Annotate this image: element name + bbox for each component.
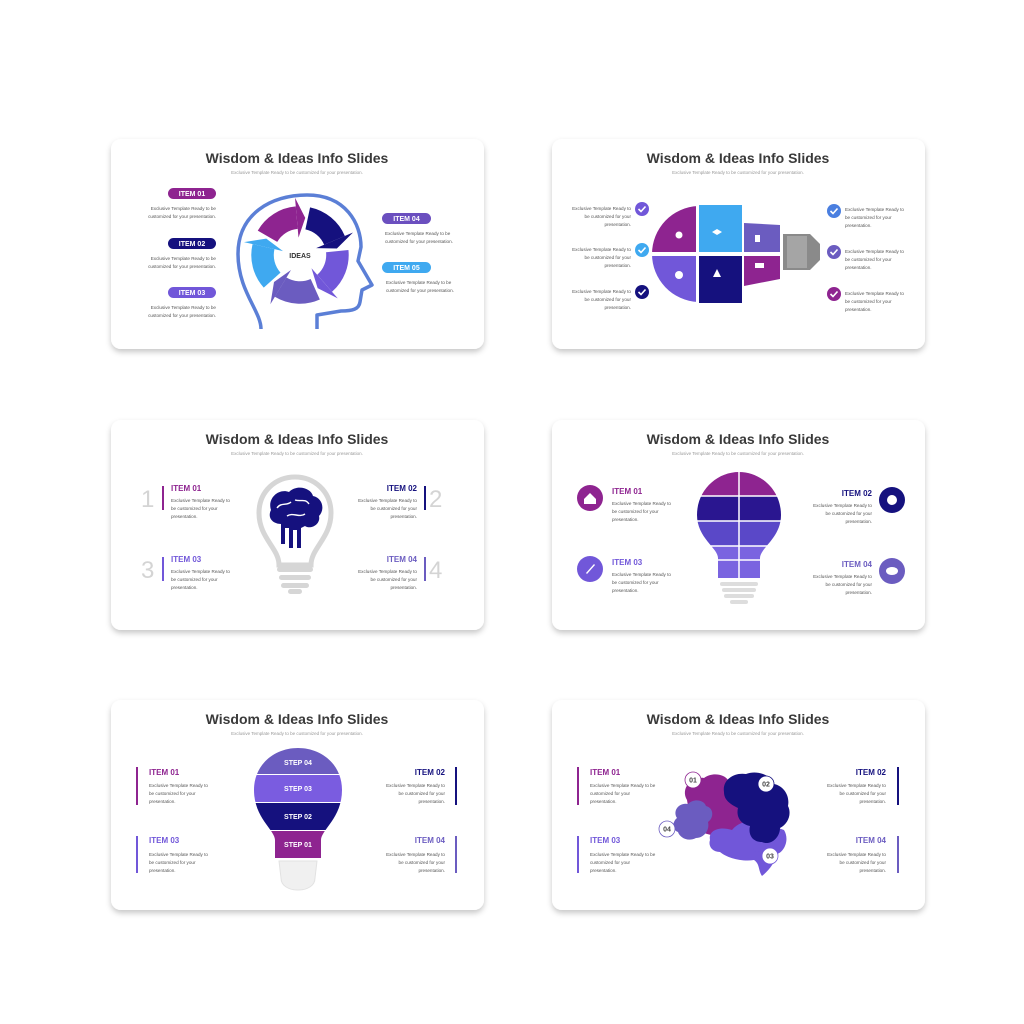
subtitle: Exclusive Template Ready to be customized for your presentation.: [231, 170, 363, 175]
left checks: be customized for your: [585, 214, 631, 219]
item 04: presentation.: [390, 585, 417, 590]
item 01: Exclusive Template Ready to: [149, 783, 208, 788]
title: Wisdom & Ideas Info Slides: [647, 711, 830, 727]
item 04: Exclusive Template Ready to: [827, 852, 886, 857]
item 03: be customized for your: [149, 860, 196, 865]
right checks: presentation.: [845, 223, 872, 228]
right checks: Exclusive Template Ready to: [845, 291, 904, 296]
bulb with brain: [259, 477, 331, 594]
title: Wisdom & Ideas Info Slides: [206, 711, 389, 727]
right checks: presentation.: [845, 307, 872, 312]
item 04: be customized for your: [840, 860, 886, 865]
item 01: ITEM 01: [612, 487, 643, 496]
item 03: presentation.: [171, 585, 198, 590]
item 02: presentation.: [859, 799, 886, 804]
item 04: be customized for your: [371, 577, 417, 582]
item 04: presentation.: [418, 868, 445, 873]
item 04: presentation.: [845, 590, 872, 595]
item 02: presentation.: [390, 514, 417, 519]
head outline: [238, 195, 372, 329]
item 01: [577, 485, 671, 522]
item 02: [386, 767, 457, 805]
item 04: [386, 836, 457, 873]
right checks: be customized for your: [845, 257, 892, 262]
item 01: Exclusive Template Ready to: [612, 501, 671, 506]
item 01: Exclusive Template Ready to be: [151, 206, 216, 211]
quadrant icons: [675, 229, 764, 279]
item 04: Exclusive Template Ready to: [358, 569, 417, 574]
item 01: presentation.: [149, 799, 176, 804]
item 01: [577, 767, 656, 805]
item 01: be customized for your: [149, 791, 196, 796]
item 03: [136, 836, 208, 873]
item 02: ITEM 02: [179, 241, 205, 248]
right checks: Exclusive Template Ready to: [845, 207, 904, 212]
item 01: presentation.: [612, 517, 639, 522]
left checks: Exclusive Template Ready to: [572, 247, 631, 252]
item 02: [358, 484, 442, 519]
item 03: be customized for your: [171, 577, 218, 582]
left checks: presentation.: [604, 222, 631, 227]
item 01: Exclusive Template Ready to be: [590, 783, 656, 788]
item 01: [141, 484, 230, 519]
item 03: [577, 556, 671, 593]
subtitle: Exclusive Template Ready to be customized for your presentation.: [231, 731, 363, 736]
bulb quadrants: [652, 205, 742, 303]
item 04: [827, 836, 899, 873]
item 02: customized for your presentation.: [148, 264, 216, 269]
item 02: Exclusive Template Ready to: [827, 783, 886, 788]
right checks: be customized for your: [845, 215, 892, 220]
right checks: [827, 204, 904, 312]
item 02: Exclusive Template Ready to: [386, 783, 445, 788]
slide 3: brain bulb numbered: [111, 420, 484, 630]
item 02: presentation.: [845, 519, 872, 524]
left checks: Exclusive Template Ready to: [572, 206, 631, 211]
item 04: ITEM 04: [387, 555, 418, 564]
item 02: be customized for your: [371, 506, 417, 511]
item 03: presentation.: [149, 868, 176, 873]
item 01: presentation.: [171, 514, 198, 519]
item 03: ITEM 03: [171, 555, 202, 564]
item 02: [813, 487, 905, 524]
bulb neck tiles: [744, 223, 780, 252]
item 03: ITEM 03: [149, 836, 180, 845]
item 01: be customized for your: [612, 509, 659, 514]
item 01: customized for your presentation.: [148, 214, 216, 219]
item 04: be customized for your: [826, 582, 872, 587]
step bulb: STEP 02: [284, 814, 312, 821]
item 02: ITEM 02: [415, 768, 446, 777]
slide 6: brain lobes: [552, 700, 925, 910]
item 01: ITEM 01: [149, 768, 180, 777]
item 04: Exclusive Template Ready to be: [385, 231, 451, 236]
item 03: [141, 555, 230, 590]
item 03: Exclusive Template Ready to: [612, 572, 671, 577]
item 02: be customized for your: [840, 791, 886, 796]
item 03: Exclusive Template Ready to: [171, 569, 230, 574]
subtitle: Exclusive Template Ready to be customized for your presentation.: [231, 451, 363, 456]
item 03: ITEM 03: [612, 558, 643, 567]
brain: 04: [663, 826, 671, 834]
left checks: presentation.: [604, 263, 631, 268]
item 03: [148, 287, 216, 318]
item 02: be customized for your: [826, 511, 872, 516]
item 03: Exclusive Template Ready to: [149, 852, 208, 857]
slide 4: puzzle bulb: [552, 420, 925, 630]
step bulb: STEP 03: [284, 786, 312, 793]
slide 2: quadrant bulb: [552, 139, 925, 349]
puzzle bulb: [697, 472, 781, 604]
item 01: customized for your: [590, 791, 631, 796]
item 02: presentation.: [418, 799, 445, 804]
item 02: Exclusive Template Ready to be: [151, 256, 216, 261]
item 04: ITEM 04: [842, 560, 873, 569]
item 05: Exclusive Template Ready to be: [386, 280, 452, 285]
item 04: customized for your presentation.: [385, 239, 453, 244]
item 04: [382, 213, 453, 244]
left checks: presentation.: [604, 305, 631, 310]
brain: [659, 772, 790, 876]
item 04: [813, 558, 905, 595]
brain: 03: [766, 854, 774, 860]
item 02: 2: [429, 486, 442, 513]
title: Wisdom & Ideas Info Slides: [647, 431, 830, 447]
item 03: presentation.: [612, 588, 639, 593]
item 04: ITEM 04: [415, 836, 446, 845]
item 02: Exclusive Template Ready to: [813, 503, 872, 508]
slide 5: stepped bulb: [111, 700, 484, 910]
subtitle: Exclusive Template Ready to be customized for your presentation.: [672, 451, 804, 456]
item 04: Exclusive Template Ready to: [386, 852, 445, 857]
item 03: customized for your: [590, 860, 631, 865]
item 02: [148, 238, 216, 269]
subtitle: Exclusive Template Ready to be customized for your presentation.: [672, 731, 804, 736]
item 02: ITEM 02: [842, 489, 873, 498]
item 01: ITEM 01: [171, 484, 202, 493]
item 02: be customized for your: [399, 791, 445, 796]
step bulb: STEP 04: [284, 760, 312, 767]
item 01: be customized for your: [171, 506, 218, 511]
step bulb: [251, 746, 346, 890]
left checks: be customized for your: [585, 297, 631, 302]
item 03: 3: [141, 557, 154, 584]
item 04: presentation.: [859, 868, 886, 873]
item 04: Exclusive Template Ready to: [813, 574, 872, 579]
item 02: [827, 767, 899, 805]
item 04: [358, 555, 442, 590]
item 01: Exclusive Template Ready to: [171, 498, 230, 503]
center label: IDEAS: [289, 253, 311, 260]
item 01: [148, 188, 216, 219]
title: Wisdom & Ideas Info Slides: [206, 431, 389, 447]
title: Wisdom & Ideas Info Slides: [647, 150, 830, 166]
item 03: ITEM 03: [590, 836, 621, 845]
item 03: customized for your presentation.: [148, 313, 216, 318]
right checks: be customized for your: [845, 299, 892, 304]
brain: 02: [762, 782, 770, 788]
cycle arrows: [244, 198, 353, 304]
item 02: ITEM 02: [856, 768, 887, 777]
item 03: presentation.: [590, 868, 617, 873]
item 05: [382, 262, 454, 293]
item 04: ITEM 04: [393, 216, 420, 223]
item 03: Exclusive Template Ready to be: [151, 305, 216, 310]
left checks: be customized for your: [585, 255, 631, 260]
item 01: 1: [141, 486, 154, 513]
right checks: Exclusive Template Ready to: [845, 249, 904, 254]
left checks: Exclusive Template Ready to: [572, 289, 631, 294]
slide 1: head ideas cycle: [111, 139, 484, 349]
item 01: ITEM 01: [590, 768, 621, 777]
item 01: ITEM 01: [179, 191, 205, 198]
item 01: presentation.: [590, 799, 617, 804]
item 03: ITEM 03: [179, 290, 205, 297]
item 02: Exclusive Template Ready to: [358, 498, 417, 503]
item 03: [577, 836, 656, 873]
bulb base: [783, 234, 820, 270]
item 03: be customized for your: [612, 580, 659, 585]
item 05: ITEM 05: [393, 265, 420, 272]
subtitle: Exclusive Template Ready to be customized for your presentation.: [672, 170, 804, 175]
item 04: 4: [429, 557, 442, 584]
right checks: presentation.: [845, 265, 872, 270]
brain: 01: [689, 778, 697, 784]
left checks: [572, 202, 649, 310]
title: Wisdom & Ideas Info Slides: [206, 150, 389, 166]
step bulb: STEP 01: [284, 842, 312, 849]
item 04: be customized for your: [399, 860, 445, 865]
item 04: ITEM 04: [856, 836, 887, 845]
item 03: Exclusive Template Ready to be: [590, 852, 656, 857]
item 01: [136, 767, 208, 805]
item 02: ITEM 02: [387, 484, 418, 493]
item 05: customized for your presentation.: [386, 288, 454, 293]
